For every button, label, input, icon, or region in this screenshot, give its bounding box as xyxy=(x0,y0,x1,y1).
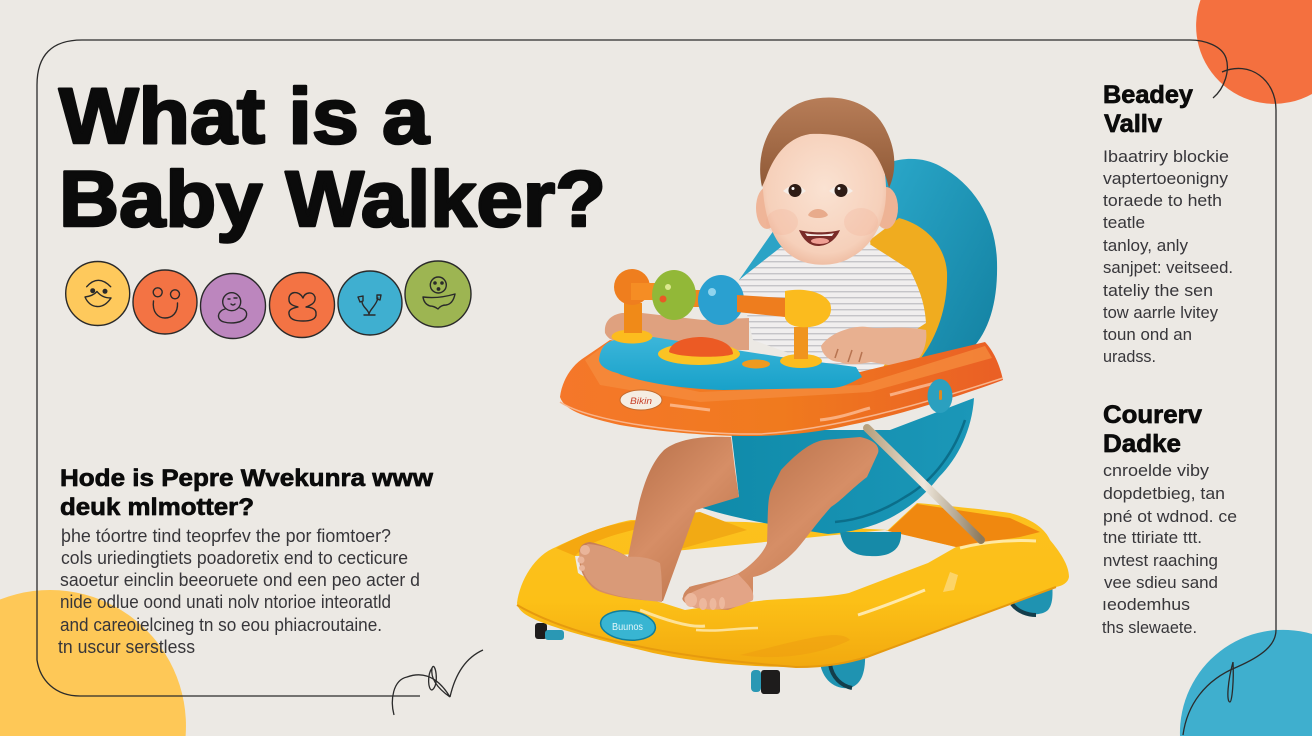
seat xyxy=(699,398,974,534)
body text: toraede to heth xyxy=(1103,191,1222,210)
left body paragraph: þhe tóortre tind teoprfev the por fiomtoer? xyxy=(61,526,391,546)
left leg xyxy=(579,437,739,601)
tray label: Bikin xyxy=(630,396,652,406)
cheeks xyxy=(766,208,878,236)
right post xyxy=(780,290,831,368)
orange rod xyxy=(737,295,785,317)
orange connector xyxy=(681,290,701,307)
front and side wheels xyxy=(535,580,1053,694)
body text: sanjpet: veitseed. xyxy=(1103,258,1233,277)
row of six round icons xyxy=(66,261,471,338)
blue ball xyxy=(698,275,744,325)
body text: Ibaatriry blockie xyxy=(1103,147,1229,166)
left heading: Hode is Pepre Wvekunra www xyxy=(60,465,433,492)
eyes xyxy=(783,184,853,197)
icon: purple baby xyxy=(200,274,266,338)
body text: tanloy, anly xyxy=(1103,236,1189,255)
face xyxy=(763,126,886,265)
icon: orange heart shape xyxy=(270,272,334,338)
body text: ıeodemhus xyxy=(1102,595,1190,614)
walker base label xyxy=(599,608,657,643)
left body paragraph: cols uriedingtiets poadoretix end to cecticure xyxy=(61,548,408,568)
body text: tow aarrle lvitey xyxy=(1103,303,1218,322)
heading: Beadey Vallv xyxy=(1103,81,1193,138)
baby head xyxy=(756,98,898,265)
left post xyxy=(612,269,655,344)
body text: uradss. xyxy=(1103,347,1156,366)
base ring xyxy=(517,503,1069,667)
baby legs xyxy=(578,437,878,610)
icon: blue stethoscope xyxy=(338,271,402,335)
heading: Courerv Dadke: Dadke xyxy=(1103,430,1181,458)
left body paragraph xyxy=(58,526,420,657)
baby torso and shirt xyxy=(739,245,926,372)
ears xyxy=(756,187,898,229)
metal support rod xyxy=(867,428,981,540)
left heading: deuk mlmotter? xyxy=(60,494,254,521)
body text: cnroelde viby xyxy=(1103,461,1210,480)
right foot xyxy=(684,574,753,610)
body text: vee sdieu sand xyxy=(1104,573,1218,592)
icon: green figure xyxy=(405,261,471,327)
heading: Courerv Dadke: Courerv xyxy=(1103,401,1202,429)
left heading xyxy=(60,465,433,521)
left body paragraph: saoetur einclin beeoruete ond een peo acter d xyxy=(60,570,420,590)
body text: dopdetbieg, tan xyxy=(1103,484,1225,503)
decorative circle: orange top right xyxy=(1196,0,1312,104)
left body paragraph: tn uscur serstless xyxy=(58,637,195,657)
title: Baby Walker? xyxy=(59,154,606,243)
hair xyxy=(760,98,894,188)
blue toy inset xyxy=(599,337,862,390)
mouth xyxy=(799,230,840,246)
right leg xyxy=(682,437,878,610)
body text: pné ot wdnod. ce xyxy=(1103,507,1237,526)
left body paragraph: nide odlue oond unati nolv ntorioe inteoratld xyxy=(60,592,391,612)
illustration: baby in walker xyxy=(517,98,1069,694)
left body paragraph: and careoielcineg tn so eou phiacroutaine. xyxy=(60,615,382,635)
body text xyxy=(1102,461,1237,637)
body text: nvtest raaching xyxy=(1103,551,1218,570)
body text: ths slewaete. xyxy=(1102,618,1197,637)
left text block xyxy=(58,465,433,657)
red button toy xyxy=(658,337,740,365)
nose xyxy=(808,209,828,218)
heading: Courerv Dadke xyxy=(1103,401,1202,458)
green ball xyxy=(652,270,696,320)
right column: second block xyxy=(1102,401,1237,637)
heading: Beadey Vallv: Beadey xyxy=(1103,81,1193,109)
tray label xyxy=(620,390,662,410)
walker base label: Buunos xyxy=(612,622,643,633)
backrest xyxy=(739,159,997,380)
body text: vaptertoeonigny xyxy=(1103,169,1229,188)
tray xyxy=(560,340,1003,436)
body text: teatle xyxy=(1103,213,1145,232)
title: What is a xyxy=(59,71,430,160)
title xyxy=(59,71,606,243)
small button xyxy=(742,360,770,368)
rear wheel xyxy=(840,532,901,556)
icon: yellow face xyxy=(66,262,130,326)
body text: toun ond an xyxy=(1103,325,1192,344)
baby arms xyxy=(605,313,926,367)
heading: Beadey Vallv: Vallv xyxy=(1104,110,1162,138)
body text: tateliy the sen xyxy=(1103,281,1213,300)
icon: orange smile xyxy=(133,270,197,334)
right column: first block xyxy=(1103,81,1233,366)
decorative circle: yellow bottom left xyxy=(0,590,186,736)
body text: tne ttiriate ttt. xyxy=(1103,528,1202,547)
body text xyxy=(1103,147,1233,366)
tray side knob xyxy=(928,379,952,413)
activity toy bar xyxy=(612,269,831,368)
decorative circle: blue bottom right xyxy=(1180,630,1312,736)
left foot xyxy=(578,544,662,602)
